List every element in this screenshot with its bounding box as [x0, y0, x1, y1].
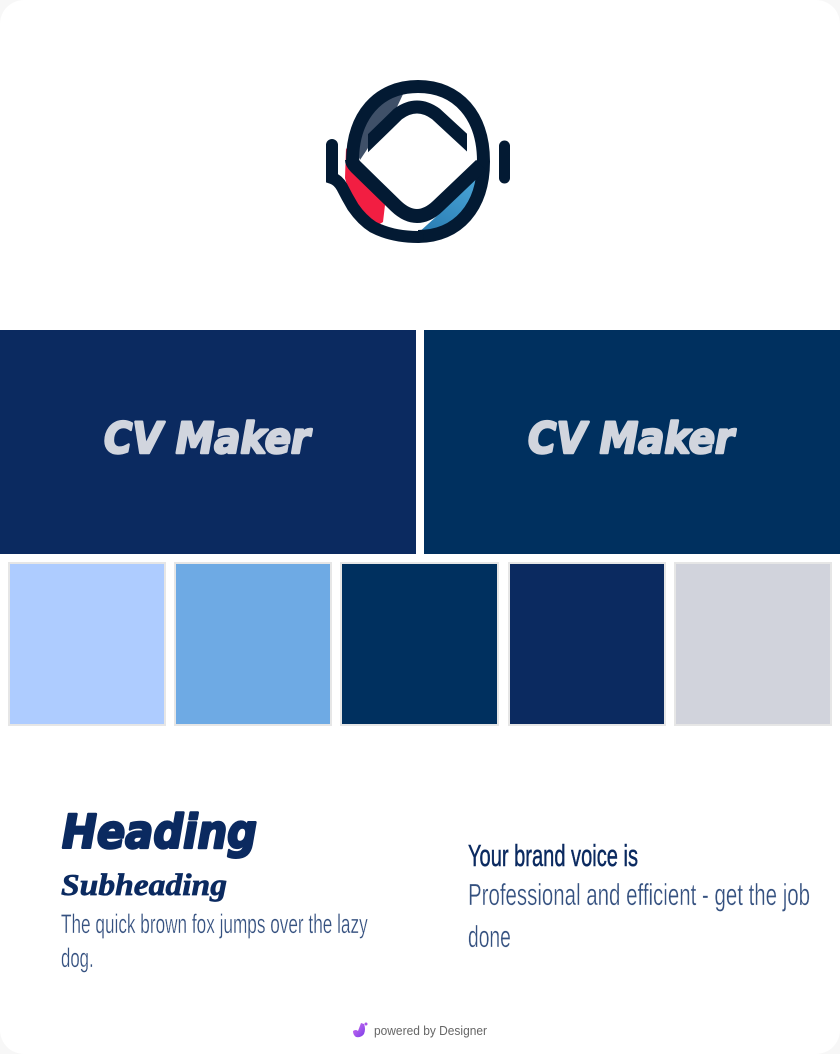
body sample line 1: The quick brown fox jumps over the lazy: [61, 908, 368, 939]
logo: outer ring: [352, 86, 484, 236]
subheading: Subheading: [61, 867, 227, 902]
logo: grey accent: [354, 90, 405, 160]
swatch: sky blue: [174, 562, 332, 726]
body sample line 2: dog.: [61, 942, 94, 973]
logo: blue accent: [417, 163, 484, 234]
swatch: light blue: [8, 562, 166, 726]
brand voice label: Your brand voice is: [468, 838, 638, 873]
logo: left ear and strap: [332, 145, 418, 237]
panel: secondary brand colour: [424, 330, 840, 554]
swatch: light grey: [674, 562, 832, 726]
brand voice: [468, 838, 810, 954]
swatch: navy: [508, 562, 666, 726]
logo: upper diamond arc: [360, 107, 475, 151]
heading: Heading: [62, 805, 257, 859]
swatch: deep blue: [340, 562, 499, 726]
footer: [353, 1022, 487, 1038]
brand name: CV Maker: [528, 414, 737, 464]
brand voice line 2: done: [468, 919, 511, 954]
panel: primary brand colour: [0, 330, 416, 554]
brand voice line 1: Professional and efficient - get the job: [468, 877, 810, 912]
typography sample: [61, 805, 368, 973]
footer text: powered by Designer: [374, 1024, 487, 1038]
icon: designer logo: [353, 1022, 368, 1037]
logo: lower diamond arc: [352, 160, 481, 216]
logo: [326, 80, 510, 243]
brand name: CV Maker: [104, 414, 313, 464]
logo: red accent: [345, 148, 385, 228]
logo: right ear: [499, 146, 510, 178]
